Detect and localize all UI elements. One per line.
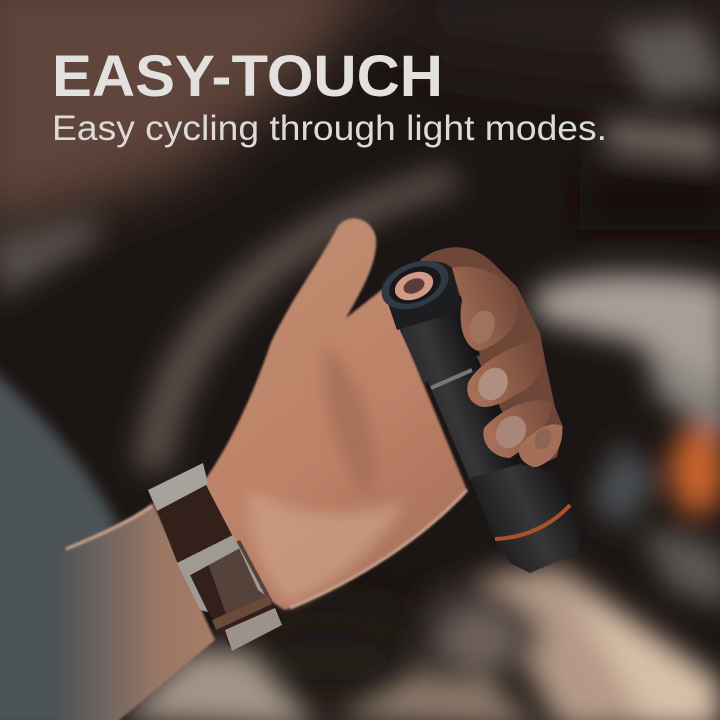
little finger: [519, 424, 562, 467]
flashlight: [374, 251, 582, 573]
flashlight mid section: [396, 295, 480, 383]
shoulder, blurred foreground: [0, 360, 118, 720]
switch button: [391, 266, 437, 306]
hand: [205, 218, 582, 610]
leather strap: [157, 483, 280, 650]
palm shading: [324, 345, 374, 500]
forearm: [55, 503, 215, 720]
title block: [52, 44, 607, 148]
switch housing: [381, 261, 463, 330]
palm lower highlight: [249, 490, 405, 605]
metal band: [431, 370, 472, 388]
subtitle: Easy cycling through light modes.: [52, 109, 607, 148]
fingernails: [465, 307, 499, 347]
palm and thumb: [205, 218, 467, 610]
index finger: [452, 267, 517, 351]
palm edge highlight: [290, 490, 467, 608]
strap loop: [212, 596, 272, 630]
strap lower section: [205, 540, 272, 620]
middle finger: [467, 338, 543, 407]
title: EASY-TOUCH: [52, 44, 443, 109]
watch: [148, 463, 282, 651]
flashlight head: [470, 464, 582, 573]
ring finger: [483, 400, 552, 458]
back of hand behind fingers: [420, 247, 563, 468]
buckle: [177, 535, 265, 612]
strap tip: [225, 608, 282, 651]
flashlight body: [427, 357, 525, 480]
switch cap rim: [374, 251, 456, 319]
top steel keeper: [148, 463, 208, 511]
forearm top highlight: [66, 506, 152, 549]
orange accent ring: [495, 505, 570, 539]
fingers: [452, 267, 562, 467]
